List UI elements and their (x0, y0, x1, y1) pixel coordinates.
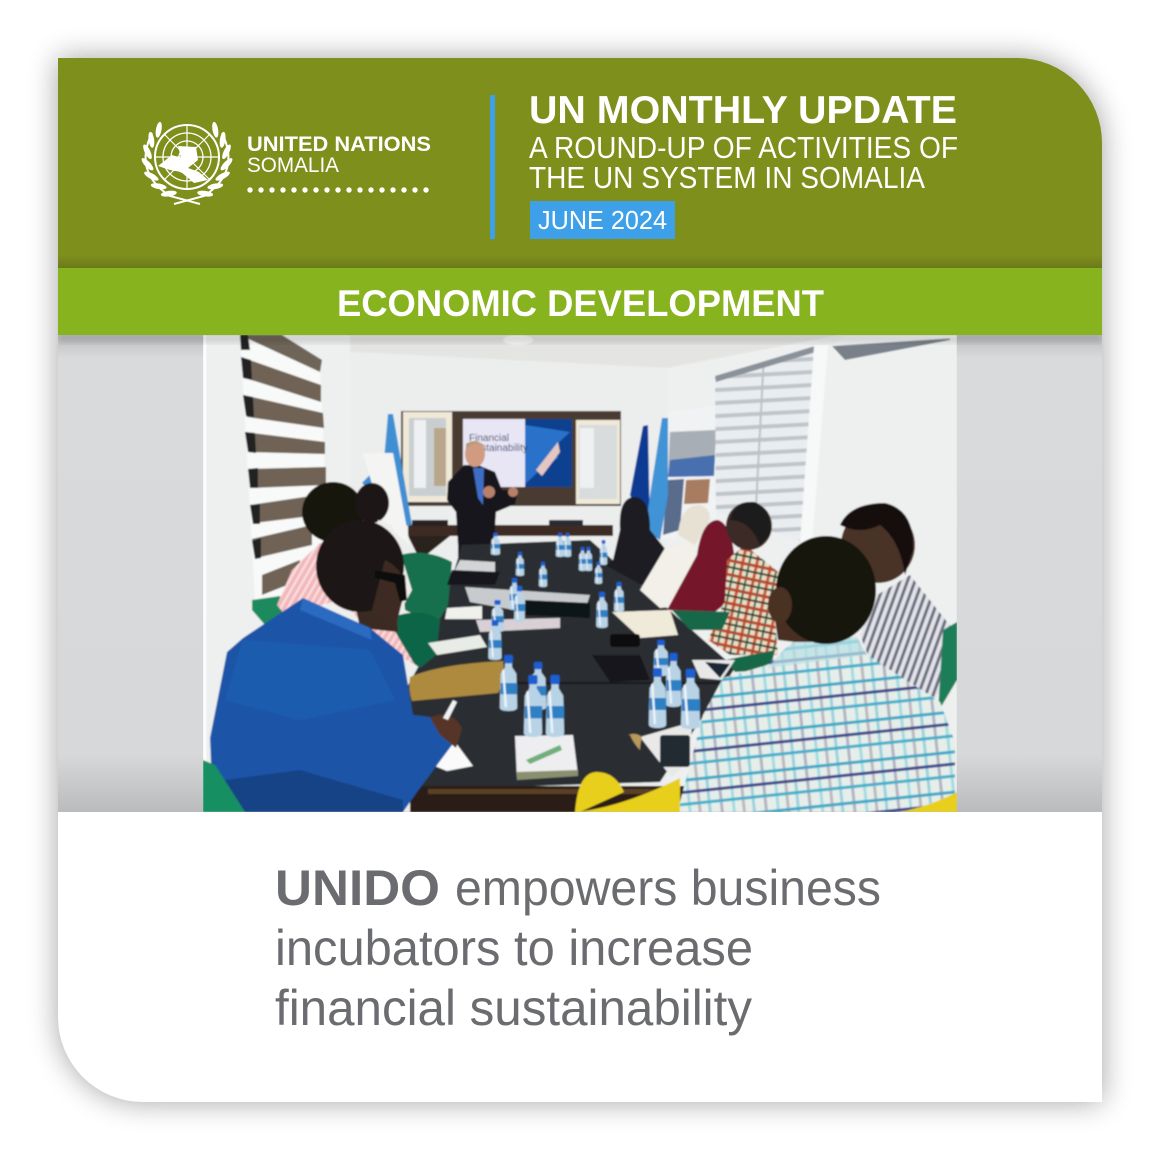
date badge: JUNE 2024 (538, 205, 667, 235)
caption: UNIDO (275, 860, 440, 916)
wreath stems (146, 133, 228, 204)
vertical blue divider (490, 95, 495, 239)
photo: UNIDO training session (203, 335, 957, 812)
banner and flags (629, 417, 716, 540)
white caption panel background (58, 812, 1102, 1102)
presenter (446, 440, 519, 558)
water bottles (488, 533, 700, 737)
header panel (58, 58, 1102, 268)
section heading: ECONOMIC DEVELOPMENT (337, 283, 824, 324)
people on left side of table (251, 481, 453, 668)
flipchart and blue flag (362, 414, 412, 545)
room walls (203, 335, 957, 812)
caption: incubators to increase (275, 920, 753, 976)
screen and mirrors on back wall (401, 411, 621, 506)
man in blue shirt (203, 520, 462, 812)
left window blind (240, 335, 328, 600)
dotted line (247, 187, 429, 193)
subtitle: THE UN SYSTEM IN SOMALIA (529, 160, 925, 195)
UN emblem (140, 121, 234, 204)
band shadow on photo (58, 334, 1102, 343)
man in checked shirt (678, 536, 955, 812)
right window blind (715, 335, 957, 545)
screen and mirrors on back wall: Financial (469, 433, 509, 444)
organisation name: UNITED NATIONS (247, 133, 431, 156)
organisation name: SOMALIA (247, 154, 339, 177)
yellow chairs (575, 772, 957, 812)
conference table (400, 540, 735, 812)
title: UN MONTHLY UPDATE (529, 89, 957, 132)
subtitle: A ROUND-UP OF ACTIVITIES OF (529, 130, 958, 165)
table items: bags, notebooks, laptops (409, 560, 735, 780)
wreath leaves (140, 121, 234, 198)
subtitle (529, 130, 958, 195)
green section band (58, 268, 1102, 335)
caption (275, 860, 881, 1036)
caption: financial sustainability (275, 980, 752, 1036)
organisation name (247, 133, 431, 177)
grey side panels (58, 334, 1102, 812)
credenza (408, 520, 613, 560)
people on right side of table (605, 497, 957, 712)
screen and mirrors on back wall: Sustainability (469, 443, 528, 454)
caption: empowers business (455, 860, 881, 916)
